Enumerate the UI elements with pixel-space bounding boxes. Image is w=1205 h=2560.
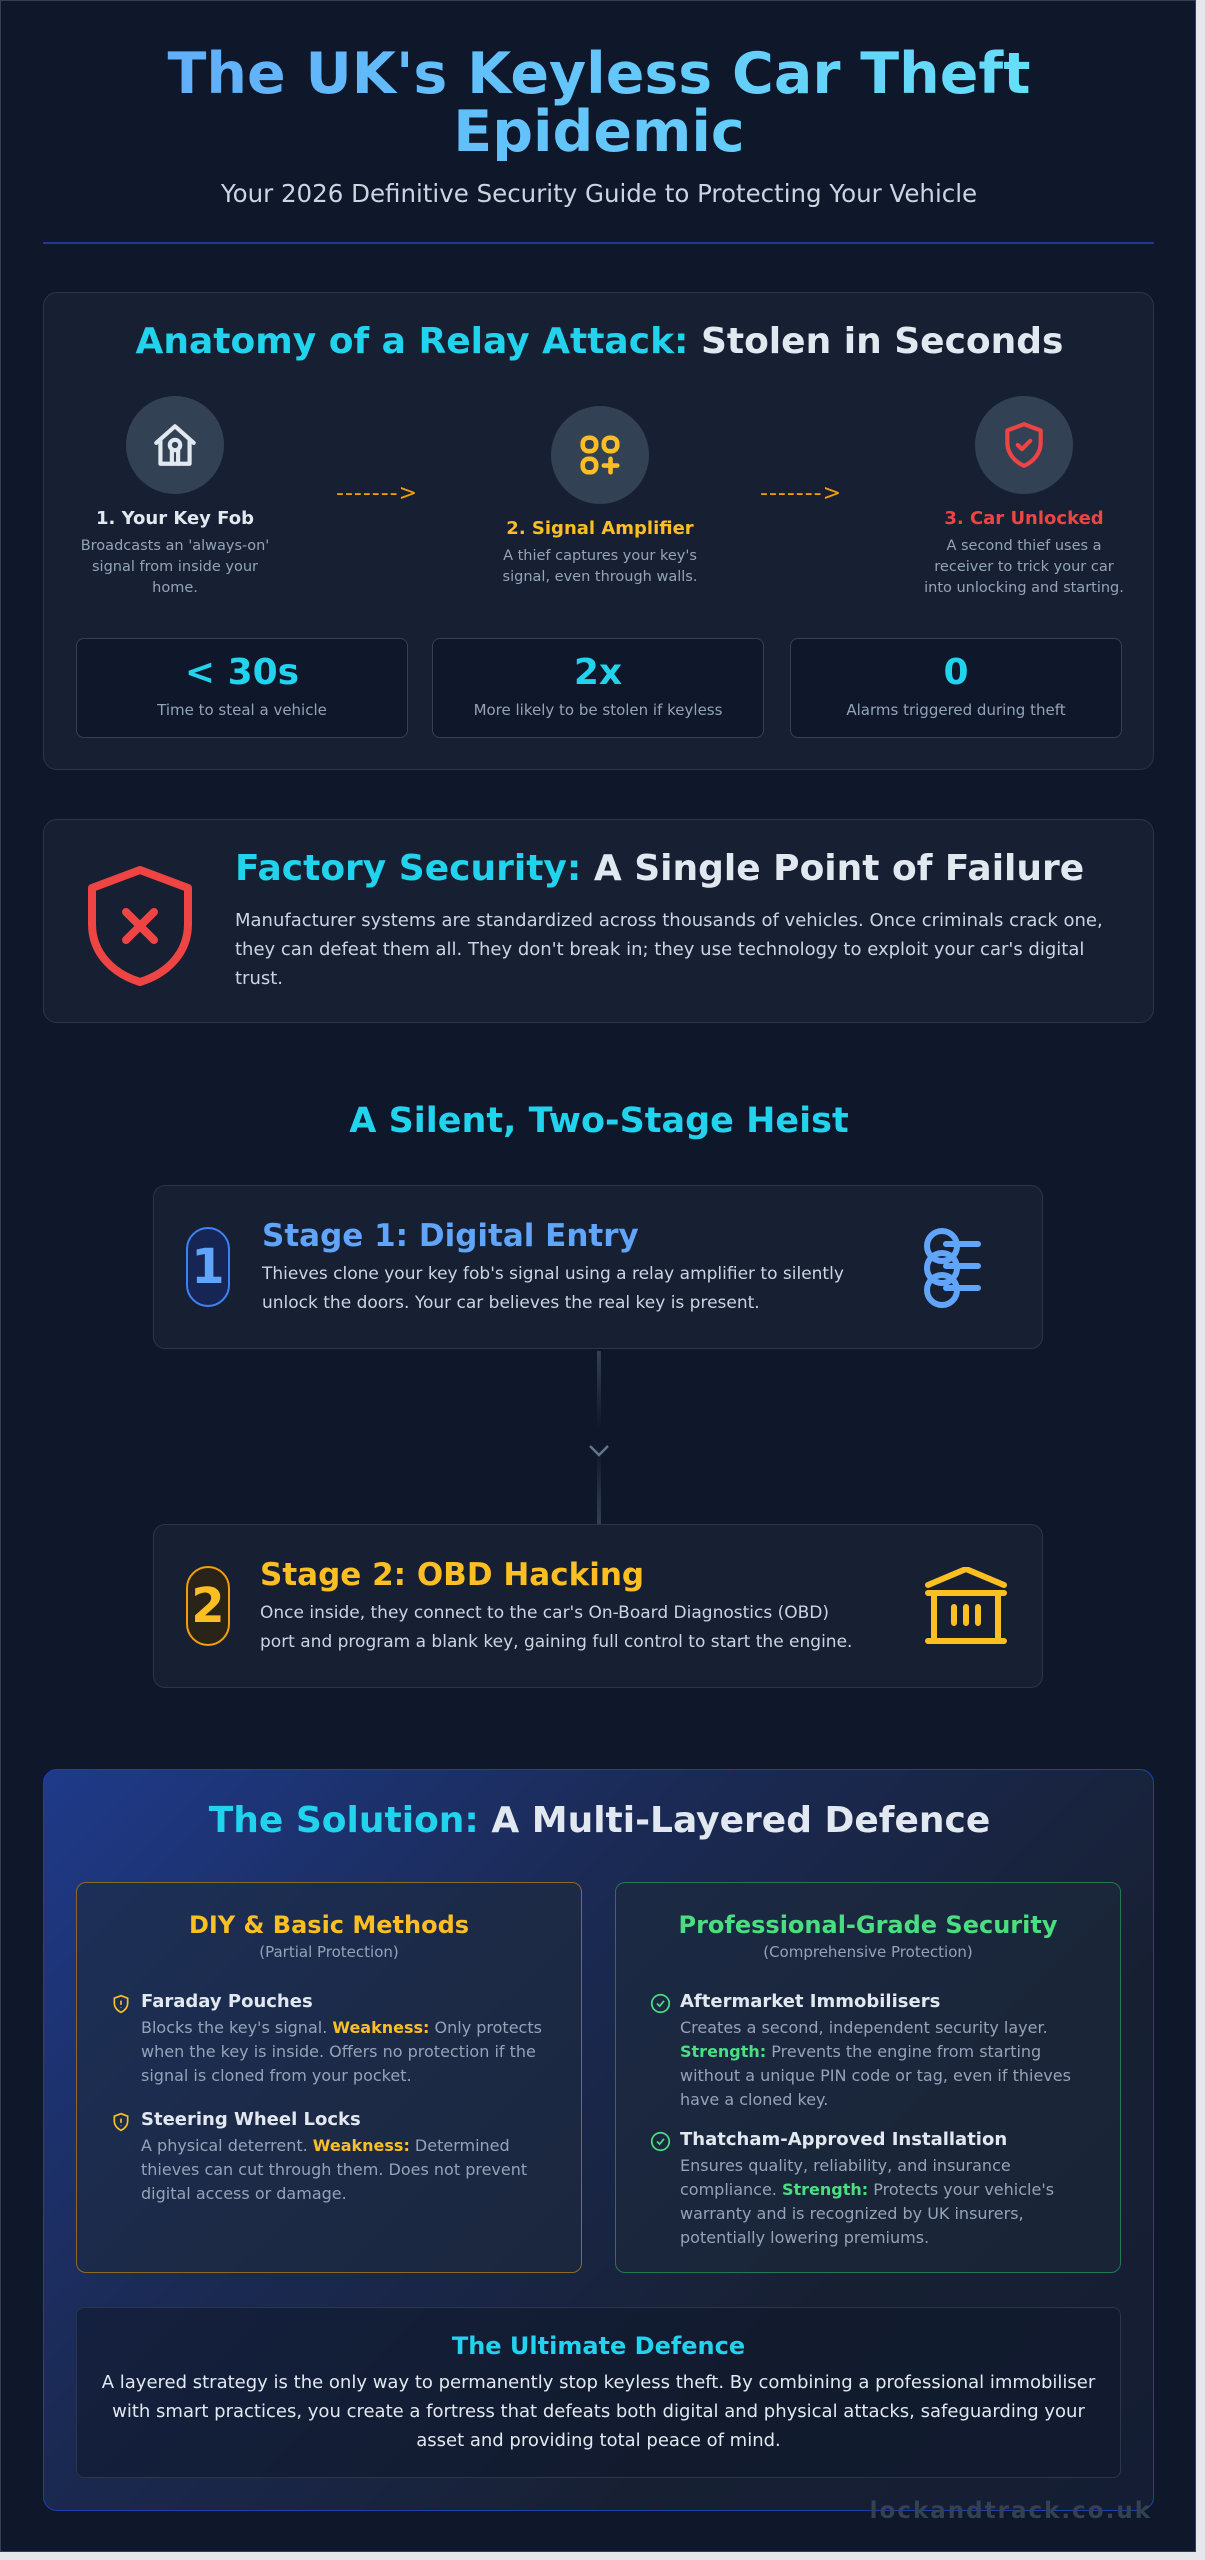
item: steering lock: A physical deterrent. Weakness: Determined thieves can cut through them. Does not prevent digital access or damage.: [141, 2136, 527, 2203]
stage 2: 2: [191, 1578, 225, 1634]
watermark: lockandtrack.co.uk: [870, 2498, 1152, 2524]
step 3: 3. Car Unlocked: [944, 508, 1104, 529]
item: steering lock: Steering Wheel Locks: [141, 2109, 361, 2130]
item: steering lock: [114, 2109, 527, 2203]
icon: house: [126, 396, 224, 494]
step 1: [81, 396, 269, 596]
heading: anatomy: Anatomy of a Relay Attack: Stolen in Seconds: [136, 321, 1063, 362]
panel: professional: Professional-Grade Security: [678, 1911, 1057, 1939]
stage 2: [153, 1524, 1043, 1688]
panel: solution: [43, 1769, 1154, 2511]
step 2: 2. Signal Amplifier: [506, 518, 694, 539]
item: thatcham: Ensures quality, reliability, and insurance compliance. Strength: Protects your vehicle's warranty and is recognized by UK insurers, potentially lowering premiums.: [680, 2156, 1054, 2247]
stat: 2x: 2x: [574, 652, 622, 693]
step 2: A thief captures your key's signal, even through walls.: [503, 548, 697, 585]
stat: 0: 0: [943, 652, 969, 693]
icon: building: [925, 1567, 1007, 1644]
step 1: 1. Your Key Fob: [96, 508, 254, 529]
panel: professional: [615, 1882, 1121, 2273]
stage 1: [153, 1185, 1043, 1349]
stage 1: Thieves clone your key fob's signal using a relay amplifier to silently unlock the doors. Your car believes the real key is present.: [262, 1264, 844, 1313]
arrow 1: ------->: [336, 481, 418, 506]
item: immobilisers: Aftermarket Immobilisers: [680, 1991, 940, 2012]
title: Epidemic: [453, 99, 745, 165]
panel: relay attack: [43, 292, 1154, 770]
step 3: A second thief uses a receiver to trick your car into unlocking and starting.: [924, 538, 1124, 596]
stat: 0: Alarms triggered during theft: [846, 701, 1066, 719]
item: faraday: Faraday Pouches: [141, 1991, 313, 2012]
step 2: [503, 406, 697, 585]
title: The UK's Keyless Car Theft: [168, 41, 1030, 107]
stat: 2x: [432, 638, 764, 738]
item: immobilisers: Creates a second, independent security layer. Strength: Prevents the engine from starting without a unique PIN code or tag, even if thieves have a cloned key.: [680, 2018, 1071, 2109]
panel: professional: (Comprehensive Protection): [763, 1943, 973, 1961]
stat: 0: [790, 638, 1122, 738]
panel: factory security: [43, 819, 1154, 1023]
callout: ultimate defence: [76, 2307, 1121, 2478]
stage 1: Stage 1: Digital Entry: [262, 1218, 639, 1254]
icon: apps: [551, 406, 649, 504]
text: factory: Manufacturer systems are standardized across thousands of vehicles. Once criminals crack one, they can defeat them all. They don't break in; they use technology to exploit your car's digital trust.: [235, 910, 1103, 989]
stage 2: Stage 2: OBD Hacking: [260, 1557, 644, 1593]
connector arrow: [589, 1351, 609, 1524]
panel: DIY: [76, 1882, 582, 2273]
stage 2: Once inside, they connect to the car's On-Board Diagnostics (OBD) port and program a blank key, gaining full control to start the engine.: [260, 1603, 852, 1652]
icon: shield x: [88, 866, 192, 986]
panel: DIY: DIY & Basic Methods: [189, 1911, 469, 1939]
arrow 2: ------->: [760, 481, 842, 506]
stage 1: 1: [191, 1239, 225, 1295]
callout: ultimate defence: A layered strategy is the only way to permanently stop keyless theft. By combining a professional immobiliser with smart practices, you create a fortress that defeats both digital and physical attacks, safeguarding your asset and providing total peace of mind.: [102, 2372, 1095, 2451]
step 1: Broadcasts an 'always‑on' signal from inside your home.: [81, 538, 269, 596]
heading: factory: Factory Security: A Single Point of Failure: [235, 848, 1084, 889]
heading: solution: The Solution: A Multi-Layered Defence: [209, 1800, 990, 1841]
stat: 30s: [76, 638, 408, 738]
item: faraday: Blocks the key's signal. Weakness: Only protects when the key is inside. Offers no protection if the signal is cloned from your pocket.: [141, 2018, 542, 2085]
heading: heist: A Silent, Two-Stage Heist: [349, 1101, 849, 1141]
step 3: [924, 396, 1124, 596]
panel: DIY: (Partial Protection): [259, 1943, 399, 1961]
callout: ultimate defence: The Ultimate Defence: [452, 2332, 745, 2360]
stat: 30s: Time to steal a vehicle: [157, 701, 327, 719]
icon: shield check: [975, 396, 1073, 494]
item: faraday: [114, 1991, 542, 2085]
title: [1, 45, 1197, 161]
stat: 2x: More likely to be stolen if keyless: [474, 701, 722, 719]
stat: 30s: < 30s: [185, 652, 299, 693]
subtitle: Your 2026 Definitive Security Guide to Protecting Your Vehicle: [221, 179, 977, 208]
icon: links: [924, 1228, 981, 1308]
item: thatcham: Thatcham-Approved Installation: [680, 2129, 1007, 2150]
